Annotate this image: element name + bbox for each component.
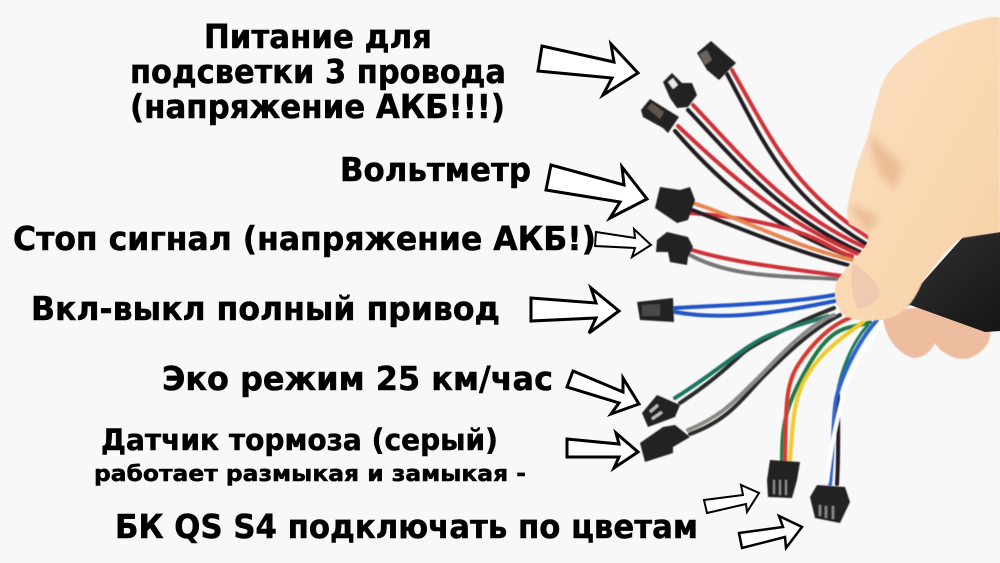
label: brake sensor bbox=[94, 423, 526, 487]
arrow to brake sensor bbox=[567, 433, 638, 468]
arrow to stop signal bbox=[595, 229, 651, 257]
heading: backlight power bbox=[130, 17, 506, 126]
wire harness bbox=[675, 70, 887, 484]
heading: backlight power: (напряжение АКБ!!!) bbox=[130, 87, 505, 126]
wires: blue all-wheel-drive pair bbox=[675, 295, 835, 316]
connector 5 bbox=[656, 232, 693, 265]
connector 10 bbox=[810, 485, 850, 523]
wires: stop signal red and gray bbox=[690, 250, 842, 279]
wires: brake sensor gray and black bbox=[688, 315, 840, 434]
heading: backlight power: подсветки 3 провода bbox=[130, 52, 506, 91]
photo: hand and module bbox=[835, 17, 1000, 359]
connector 6 bbox=[637, 298, 674, 322]
connector 4 bbox=[655, 187, 695, 223]
arrow to controller connector 2 bbox=[739, 516, 802, 548]
arrows bbox=[531, 44, 802, 548]
label: eco mode: Эко режим 25 км/час bbox=[162, 359, 553, 398]
connector 9 bbox=[767, 460, 800, 498]
label: brake sensor: работает размыкая и замыкая - bbox=[94, 462, 526, 487]
wires: eco mode green and black bbox=[675, 308, 834, 403]
connector 2 bbox=[663, 73, 697, 108]
label: brake sensor: Датчик тормоза (серый) bbox=[101, 423, 498, 457]
connector 1 bbox=[697, 41, 736, 80]
label: voltmeter: Вольтметр bbox=[340, 150, 531, 189]
finger shadow bbox=[848, 135, 903, 233]
connector 8 bbox=[640, 425, 690, 462]
label: stop signal: Стоп сигнал (напряжение АКБ!) bbox=[13, 219, 596, 258]
label: all-wheel drive: Вкл-выкл полный привод bbox=[31, 289, 500, 328]
arrow to controller connector 1 bbox=[704, 485, 759, 513]
wires: controller group two bbox=[827, 317, 887, 484]
arrow to all-wheel-drive connector bbox=[531, 288, 619, 333]
arrow to power connectors bbox=[538, 44, 638, 95]
black module bbox=[880, 232, 1000, 332]
arrow to voltmeter bbox=[546, 165, 647, 218]
wires: upper red and black pairs bbox=[675, 70, 869, 257]
hand bbox=[835, 17, 1000, 321]
connectors bbox=[637, 41, 850, 523]
wires: controller group one bbox=[782, 318, 870, 460]
lower fingers bbox=[883, 305, 990, 359]
heading: backlight power: Питание для bbox=[204, 17, 432, 56]
thumb nail bbox=[851, 263, 880, 308]
arrow to eco mode connector bbox=[567, 371, 639, 414]
wires: voltmeter orange, red and black bbox=[690, 203, 852, 265]
connector 7 bbox=[642, 395, 680, 427]
label: on-board computer: БК QS S4 подключать по цветам bbox=[115, 507, 698, 546]
connector 3 bbox=[641, 99, 679, 133]
